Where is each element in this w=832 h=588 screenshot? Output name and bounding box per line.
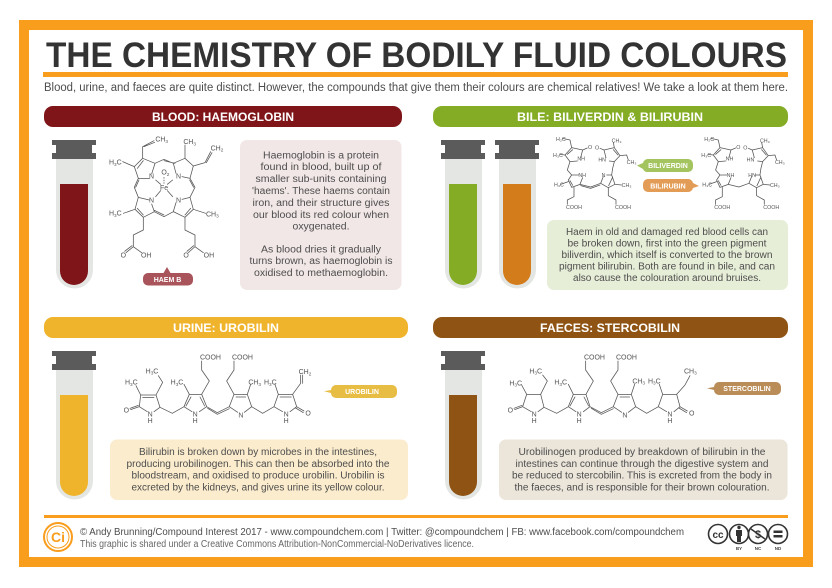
text block: blood: turns brown, as haemoglobin is: [250, 256, 393, 267]
molecule: stercobilin: H: [667, 418, 672, 425]
text block: blood: iron, and their structure gives: [252, 198, 390, 209]
label: biliverdin: [637, 159, 693, 172]
molecule: bilirubin: CH₃: [770, 183, 780, 189]
label: haem B: HAEM B: [154, 277, 181, 284]
heading: urine: URINE: UROBILIN: [173, 321, 279, 335]
molecule: haem B: CH: [155, 137, 165, 144]
text block: blood: Haemoglobin is a protein: [263, 150, 379, 161]
molecule: stercobilin: C: [537, 368, 542, 375]
text block: urine: Bilirubin is broken down by microbes in the intestines,: [139, 447, 377, 458]
molecule: urobilin: 3: [176, 382, 179, 387]
molecule: stercobilin: N: [622, 412, 627, 419]
molecule: biliverdin: O: [588, 145, 592, 151]
molecule: stercobilin: H: [509, 380, 514, 387]
logo: Compound Interest: [44, 523, 72, 551]
molecule: stercobilin: CH: [684, 368, 694, 375]
molecule: biliverdin: CH₃: [622, 183, 632, 189]
text block: blood: [240, 140, 402, 290]
molecule: urobilin: C: [153, 368, 158, 375]
molecule: haem B: 3: [114, 213, 117, 218]
heading: bile: BILE: BILIVERDIN & BILIRUBIN: [517, 110, 703, 124]
molecule: haem B: 3: [114, 162, 117, 167]
molecule: biliverdin: CH₃: [612, 139, 622, 145]
text block: bile: be broken down, first into the green pigment: [568, 238, 767, 250]
molecule: urobilin: O: [124, 408, 130, 415]
label: haem B: [143, 267, 193, 286]
molecule: stercobilin: CH: [632, 378, 642, 385]
molecule: urobilin: N: [284, 412, 289, 419]
text block: faeces: the faeces, and is responsible for their brown colouration.: [514, 483, 770, 494]
molecule: bilirubin: HN: [747, 158, 754, 164]
heading: urine: [44, 317, 408, 338]
text block: urine: [110, 440, 408, 500]
text block: faeces: intestines can continue through the digestive system and: [516, 459, 768, 470]
molecule: biliverdin: [553, 137, 637, 211]
molecule: stercobilin: H: [554, 380, 559, 387]
molecule: urobilin: 3: [269, 382, 272, 387]
panel: bile: [433, 106, 788, 290]
molecule: haem B: N: [176, 197, 181, 204]
molecule: haem B: OH: [141, 252, 151, 259]
label: biliverdin: BILIVERDIN: [648, 163, 688, 170]
title: THE CHEMISTRY OF BODILY FLUID COLOURS: [46, 36, 787, 75]
molecule: stercobilin: N: [577, 412, 582, 419]
molecule: bilirubin: O: [736, 145, 740, 151]
icon: creative commons licence: cc: [712, 530, 724, 541]
molecule: urobilin: 3: [151, 371, 154, 376]
text block: blood: oxygenated.: [292, 222, 350, 233]
molecule: bilirubin: COOH: [763, 205, 779, 211]
logo: Compound Interest: Ci: [51, 529, 65, 545]
molecule: bilirubin: O: [743, 145, 747, 151]
molecule: urobilin: N: [238, 412, 243, 419]
text block: bile: pigment bilirubin. Both are found in bile, and can: [559, 262, 775, 272]
text block: blood: As blood dries it gradually: [261, 244, 381, 255]
molecule: stercobilin: C: [517, 380, 522, 387]
molecule: haem B: H: [109, 160, 114, 167]
text block: blood: found in blood, built up of: [260, 162, 382, 173]
molecule: haem B: CH: [206, 211, 216, 218]
molecule: bilirubin: H₃C: [701, 153, 711, 159]
heading: bile: [433, 106, 788, 127]
text block: blood: smaller sub-units containing: [256, 174, 386, 185]
molecule: haem B: H: [109, 211, 114, 218]
molecule: bilirubin: [701, 137, 785, 211]
molecule: urobilin: H: [193, 418, 198, 425]
molecule: bilirubin: NH: [727, 173, 734, 179]
title rule: [43, 72, 788, 77]
molecule: bilirubin: CH₃: [760, 139, 770, 145]
molecule: stercobilin: H: [532, 418, 537, 425]
molecule: stercobilin: N: [667, 412, 672, 419]
molecule: haem B: C: [117, 211, 122, 218]
molecule: haem B: 3: [193, 141, 196, 146]
molecule: urobilin: H: [264, 380, 269, 387]
molecule: stercobilin: COOH: [616, 354, 637, 361]
text block: faeces: [499, 440, 788, 500]
heading: blood: [44, 106, 402, 127]
molecule: urobilin: C: [178, 380, 183, 387]
molecule: urobilin: H: [171, 380, 176, 387]
molecule: haem B: CH: [211, 145, 221, 152]
molecule: biliverdin: H₃C: [554, 182, 564, 188]
molecule: bilirubin: H₃C: [702, 182, 712, 188]
molecule: biliverdin: CH₃: [627, 160, 637, 166]
molecule: stercobilin: [508, 354, 697, 425]
molecule: haem B: C: [117, 160, 122, 167]
molecule: biliverdin: NH: [577, 157, 585, 163]
molecule: haem B: [109, 137, 224, 259]
molecule: urobilin: C: [133, 380, 138, 387]
heading: faeces: FAECES: STERCOBILIN: [540, 321, 680, 335]
panel: faeces: [433, 317, 788, 500]
footer credits: [80, 527, 684, 550]
molecule: haem B: O: [183, 252, 189, 259]
text block: bile: Haem in old and damaged red blood cells can: [566, 227, 768, 238]
molecule: stercobilin: 3: [559, 382, 562, 387]
molecule: urobilin: H: [125, 380, 130, 387]
icon: urine test tube: [52, 351, 96, 500]
molecule: stercobilin: O: [689, 410, 695, 417]
molecule: stercobilin: 3: [653, 381, 656, 386]
icon: creative commons licence: $: [755, 529, 761, 541]
molecule: biliverdin: HN: [598, 158, 606, 164]
molecule: haem B: O: [161, 170, 167, 177]
molecule: haem B: 3: [165, 139, 168, 144]
molecule: haem B: O: [121, 252, 127, 259]
text block: urine: excreted by the kidneys, and gives urine its yellow colour.: [132, 483, 384, 494]
text block: faeces: Urobilinogen produced by breakdown of bilirubin in the: [518, 447, 766, 458]
molecule: haem B: 3: [216, 214, 219, 219]
molecule: urobilin: H: [148, 418, 153, 425]
molecule: haem B: N: [149, 197, 154, 204]
text block: blood: our blood its red colour when: [253, 210, 389, 221]
molecule: stercobilin: COOH: [584, 354, 605, 361]
molecule: biliverdin: O: [595, 145, 599, 151]
molecule: bilirubin: CH₃: [775, 160, 785, 166]
text block: faeces: be reduced to stercobilin. This is excreted from the body in: [512, 471, 772, 482]
molecule: stercobilin: H: [577, 418, 582, 425]
icon: biliverdin test tube: [441, 140, 485, 288]
molecule: haem B: Fe: [160, 185, 168, 192]
molecule: biliverdin: COOH: [615, 205, 631, 211]
molecule: biliverdin: H₂C: [556, 137, 566, 143]
molecule: urobilin: COOH: [200, 354, 221, 361]
label: urobilin: UROBILIN: [345, 389, 379, 396]
text block: urine: bloodstream, and oxidised to produce urobilin. Urobilin is: [132, 471, 385, 482]
intro text: Blood, urine, and faeces are quite distinct. However, the compounds that give them their colours are chemical relatives! We take a look at them here.: [44, 82, 788, 94]
molecule: stercobilin: C: [562, 380, 567, 387]
text block: bile: [547, 220, 788, 290]
text block: bile: biliverdin, which itself is converted to the brown: [562, 250, 772, 261]
molecule: biliverdin: NH: [578, 173, 586, 179]
panel: urine: [44, 317, 408, 500]
molecule: bilirubin: H₂C: [704, 137, 714, 143]
molecule: urobilin: C: [272, 380, 277, 387]
text block: urine: producing urobilinogen. This can then be absorbed into the: [126, 459, 390, 470]
molecule: urobilin: N: [193, 412, 198, 419]
heading: blood: BLOOD: HAEMOGLOBIN: [152, 110, 294, 124]
molecule: urobilin: 3: [258, 382, 261, 387]
molecule: stercobilin: H: [529, 368, 534, 375]
molecule: urobilin: 3: [130, 382, 133, 387]
molecule: stercobilin: 3: [534, 371, 537, 376]
icon: creative commons licence: [708, 524, 788, 551]
icon: faeces test tube: [441, 351, 485, 500]
molecule: stercobilin: C: [656, 378, 661, 385]
label: stercobilin: STERCOBILIN: [723, 386, 771, 393]
label: stercobilin: [707, 382, 781, 395]
molecule: haem B: 2: [221, 148, 224, 153]
molecule: bilirubin: NH: [726, 157, 733, 163]
molecule: stercobilin: 3: [642, 381, 645, 386]
molecule: bilirubin: COOH: [714, 205, 730, 211]
molecule: bilirubin: HN: [748, 173, 756, 179]
molecule: urobilin: O: [305, 410, 311, 417]
molecule: urobilin: H: [146, 368, 151, 375]
molecule: stercobilin: O: [508, 408, 514, 415]
footer credits: © Andy Brunning/Compound Interest 2017 - www.compoundchem.com | Twitter: @compoundchem | FB: www.facebook.com/compoundchem: [80, 527, 684, 538]
molecule: urobilin: CH: [248, 380, 258, 387]
molecule: urobilin: COOH: [232, 354, 253, 361]
molecule: haem B: N: [149, 173, 154, 180]
panel: blood: [44, 106, 402, 290]
label: bilirubin: [643, 179, 699, 192]
molecule: urobilin: [124, 354, 312, 425]
heading: faeces: [433, 317, 788, 338]
icon: blood test tube: [52, 140, 96, 288]
label: bilirubin: BILIRUBIN: [650, 184, 686, 190]
molecule: urobilin: 2: [309, 371, 312, 376]
molecule: biliverdin: COOH: [566, 205, 582, 211]
icon: bilirubin test tube: [495, 140, 539, 288]
icon: creative commons licence: NC: [755, 546, 762, 551]
molecule: biliverdin: N: [602, 173, 606, 179]
molecule: haem B: 2: [167, 172, 170, 177]
molecule: stercobilin: 3: [694, 371, 697, 376]
molecule: haem B: OH: [204, 252, 214, 259]
molecule: urobilin: H: [284, 418, 289, 425]
molecule: urobilin: N: [148, 412, 153, 419]
label: urobilin: [324, 385, 397, 398]
footer rule: [44, 515, 788, 518]
footer credits: This graphic is shared under a Creative Commons Attribution-NonCommercial-NoDerivatives licence.: [80, 539, 474, 550]
icon: creative commons licence: ND: [775, 546, 782, 551]
molecule: haem B: CH: [183, 139, 193, 146]
molecule: stercobilin: 3: [514, 383, 517, 388]
molecule: stercobilin: N: [532, 412, 537, 419]
text block: bile: also cause the colouration around bruises.: [573, 273, 761, 284]
text block: blood: oxidised to methaemoglobin.: [254, 268, 388, 279]
text block: blood: 'haems'. These haems contain: [252, 186, 390, 197]
icon: creative commons licence: BY: [736, 546, 742, 551]
molecule: urobilin: CH: [299, 369, 309, 376]
molecule: stercobilin: H: [648, 378, 653, 385]
molecule: haem B: N: [176, 173, 181, 180]
molecule: biliverdin: H₃C: [553, 153, 563, 159]
